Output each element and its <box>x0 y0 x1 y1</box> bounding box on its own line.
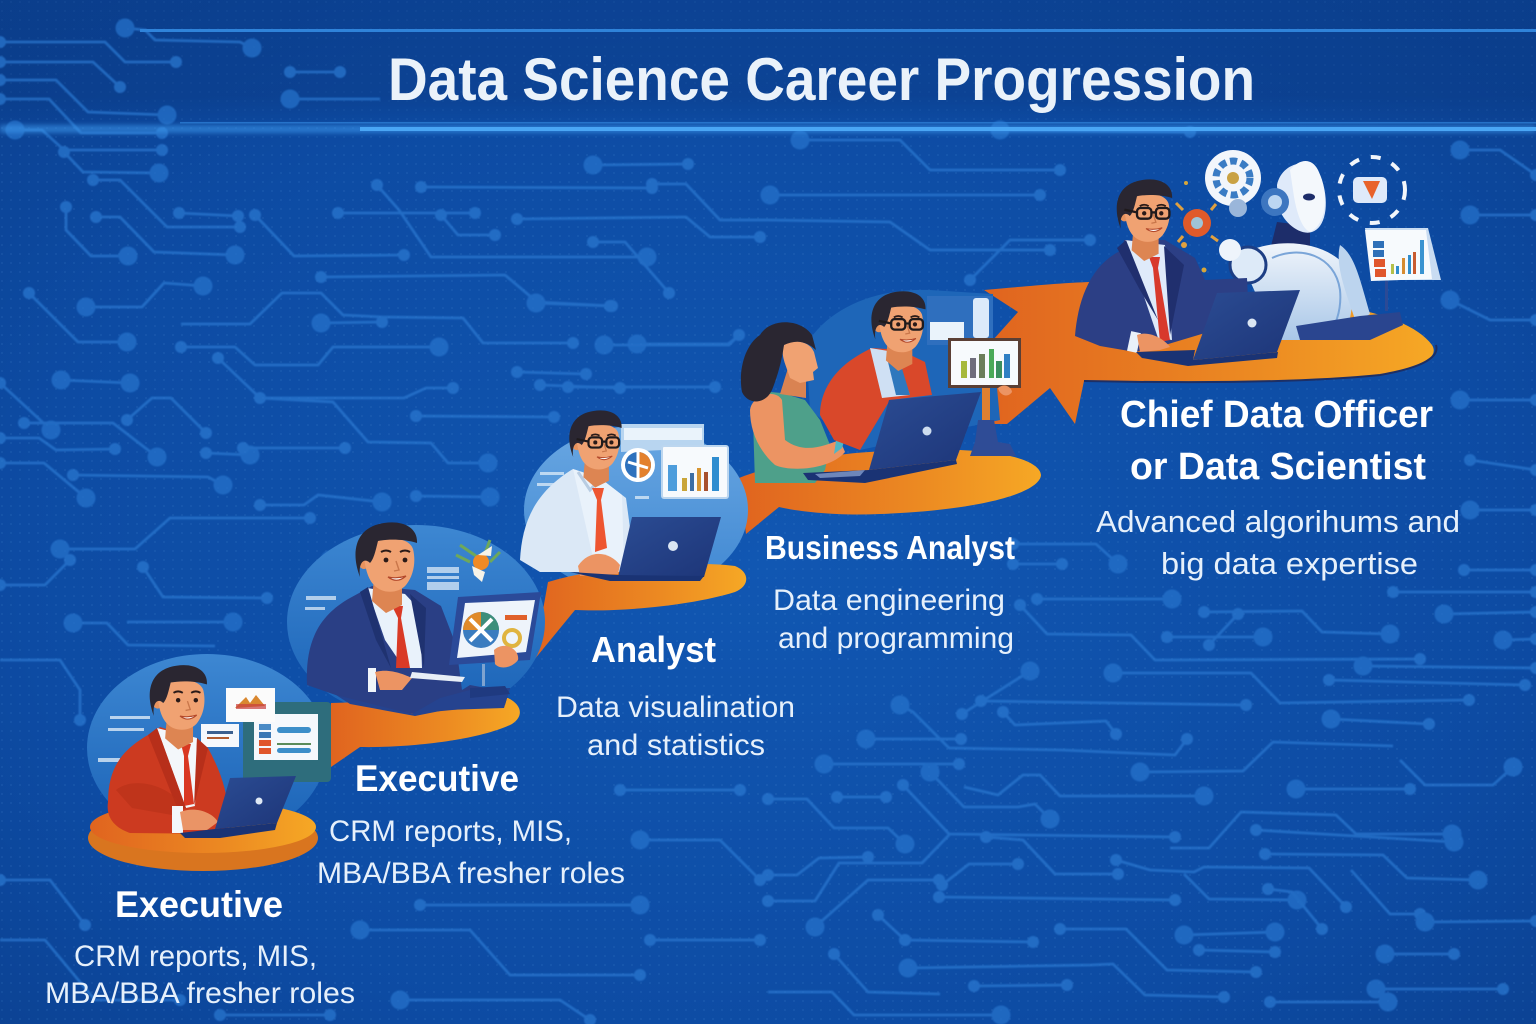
label: Chief Data Officer <box>1096 394 1460 581</box>
label: Executive first step: Executive <box>115 884 283 925</box>
step 1 bubble <box>87 654 327 842</box>
step 3 bubble <box>524 426 748 594</box>
burst icon <box>1176 181 1218 272</box>
robot desk stand <box>1296 312 1403 340</box>
chart stand <box>970 388 1016 456</box>
label: Chief Data Officer: or Data Scientist <box>1130 446 1426 488</box>
person: man in red blazer <box>803 291 1021 483</box>
step 3 arrow and platform <box>534 564 746 660</box>
dashboard panels <box>201 688 331 782</box>
label: Executive second step: CRM reports, MIS, <box>329 815 572 848</box>
label: Executive first step <box>45 884 355 1010</box>
back window <box>621 424 704 452</box>
laptop <box>180 776 296 838</box>
label: Executive second step: MBA/BBA fresher roles <box>317 857 625 890</box>
label: Chief Data Officer: big data expertise <box>1161 546 1418 581</box>
header rules <box>0 29 1536 133</box>
label: Analyst: Data visualination <box>556 691 795 724</box>
step 5 arrow and platform <box>984 282 1437 424</box>
person: executive in red jacket <box>98 665 331 838</box>
bar chart <box>662 446 728 498</box>
bar chart <box>1365 228 1441 311</box>
dashed circle icon <box>1339 157 1405 223</box>
laptop <box>1136 290 1300 366</box>
title: Data Science Career Progression <box>388 46 1255 113</box>
step 1 platform <box>88 801 318 871</box>
step 2 arrow and platform <box>331 698 520 767</box>
flower icon <box>456 540 500 582</box>
person: analyst in white shirt <box>520 410 728 581</box>
step 2 bubble <box>287 525 545 719</box>
label: Chief Data Officer: Advanced algorihums and <box>1096 504 1460 539</box>
label: Analyst: and statistics <box>587 729 765 762</box>
label: Executive second step: Executive <box>355 758 519 799</box>
bar chart <box>948 338 1021 395</box>
info panel <box>927 296 993 345</box>
desk folder <box>336 672 510 716</box>
gear icon <box>1205 150 1261 217</box>
label: Analyst <box>556 629 795 762</box>
label: Business Analyst <box>765 529 1015 655</box>
man in suit <box>1075 240 1248 352</box>
label: Executive first step: MBA/BBA fresher roles <box>45 977 355 1010</box>
label: Executive second step <box>317 758 625 890</box>
person: chief data officer with robot <box>1075 150 1441 366</box>
label: Executive first step: CRM reports, MIS, <box>74 940 317 973</box>
laptop <box>570 517 721 581</box>
person: executive in navy suit <box>305 522 541 716</box>
laptop <box>803 392 981 483</box>
label: Business Analyst: and programming <box>778 622 1014 655</box>
robot <box>1219 161 1370 340</box>
label: Business Analyst: Data engineering <box>773 584 1005 617</box>
circle badge <box>621 448 655 482</box>
label: Business Analyst: Business Analyst <box>765 529 1015 566</box>
label: Chief Data Officer: Chief Data Officer <box>1120 394 1433 436</box>
monitor <box>449 592 541 698</box>
label: Analyst: Analyst <box>591 629 716 670</box>
step 4 arrow and platform <box>739 450 1041 534</box>
person: woman analyst <box>741 322 850 483</box>
step 4 bubble <box>806 290 1000 450</box>
